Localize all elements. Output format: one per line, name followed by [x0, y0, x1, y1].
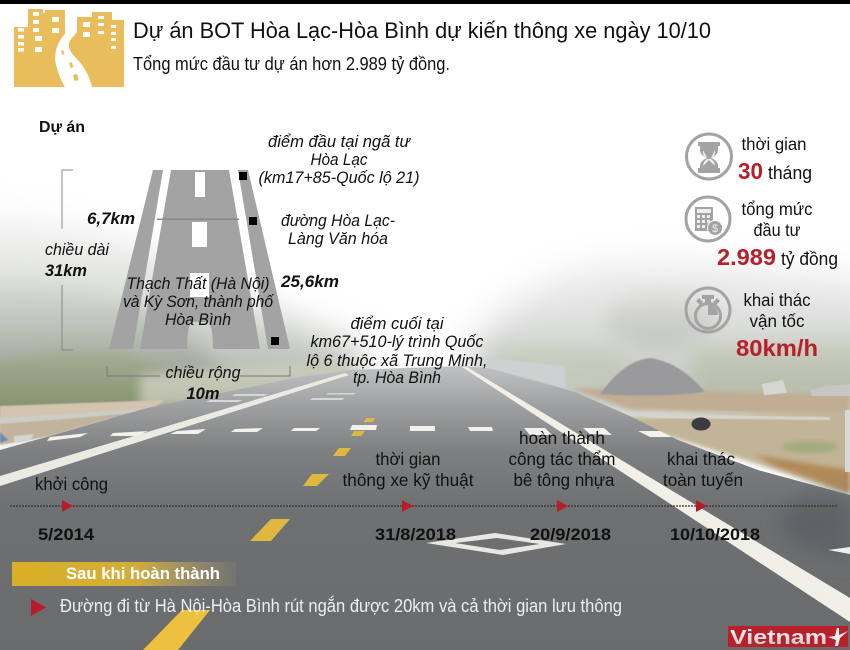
- banner: after completion: Sau khi hoàn thành: [66, 565, 220, 583]
- annotation: start point: (km17+85-Quốc lộ 21): [258, 168, 420, 187]
- title: Dự án BOT Hòa Lạc-Hòa Bình dự kiến thông xe ngày 10/10: [133, 18, 711, 43]
- stat: operating speed: khai thác: [744, 290, 811, 310]
- annotation: Hoa Lac road: Làng Văn hóa: [288, 229, 388, 248]
- fog overlay: [0, 100, 850, 410]
- stat: operating speed: vận tốc: [750, 311, 805, 331]
- milestone: start of construction: 5/2014: [38, 525, 95, 544]
- annotation: width: 10m: [186, 384, 220, 403]
- milestone: asphalt paving complete: 20/9/2018: [530, 525, 611, 544]
- milestone: asphalt paving complete: bê tông nhựa: [514, 470, 615, 490]
- asphalt road: [0, 366, 850, 650]
- annotation: end point: km67+510-lý trình Quốc: [310, 332, 484, 351]
- icon: hourglass: [686, 134, 732, 179]
- width bracket: [107, 366, 290, 376]
- stat: duration: thời gian: [742, 134, 806, 154]
- icon: calculator and coin: $: [712, 223, 718, 235]
- annotation: length: chiều dài: [45, 240, 110, 259]
- length bracket: [62, 170, 73, 350]
- logo: Vietnam+: Vietnam: [730, 627, 827, 649]
- icon: calculator and coin: [686, 197, 730, 241]
- stat: duration: [686, 134, 812, 184]
- milestone: technical opening: thời gian: [376, 449, 440, 469]
- fence: [487, 358, 565, 388]
- annotation: start point: Hòa Lạc: [310, 150, 368, 169]
- annotation: location: Hòa Bình: [165, 310, 231, 329]
- annotation: Hoa Lac road: đường Hòa Lạc-: [281, 211, 395, 230]
- annotation: 25.6 km: 25,6km: [280, 272, 339, 291]
- milestone: asphalt paving complete: hoàn thành: [519, 428, 605, 448]
- milestone: technical opening: thông xe kỹ thuật: [342, 470, 474, 490]
- stat: total investment: tỷ đồng: [781, 249, 838, 269]
- milestone: technical opening: 31/8/2018: [375, 525, 456, 544]
- annotation: width: [166, 363, 241, 403]
- stat: duration: 30: [738, 158, 763, 184]
- stat: total investment: tổng mức: [742, 199, 813, 219]
- milestone: start of construction: khởi công: [35, 474, 108, 494]
- section heading: project: Dự án: [39, 119, 85, 136]
- rock pile: [600, 358, 705, 396]
- annotation: Hoa Lac road: [281, 211, 395, 248]
- banner: after completion: [12, 562, 236, 586]
- subtitle: Tổng mức đầu tư dự án hơn 2.989 tỷ đồng.: [133, 54, 450, 74]
- milestone: start of construction: [35, 474, 108, 544]
- annotation: start point: [258, 132, 420, 187]
- annotation: end point: tp. Hòa Bình: [353, 368, 441, 387]
- icon: city and winding road: [14, 9, 124, 87]
- milestone: asphalt paving complete: [508, 428, 616, 544]
- stat: total investment: đầu tư: [754, 220, 801, 240]
- annotation: start point: điểm đầu tại ngã tư: [268, 132, 411, 151]
- stat: operating speed: 80km/h: [736, 335, 818, 361]
- milestone: full route operation: khai thác: [667, 449, 735, 469]
- ground left: [0, 400, 165, 420]
- milestone: technical opening: [342, 449, 474, 544]
- stat: total investment: 2.989: [717, 244, 776, 270]
- stat: operating speed: [686, 288, 818, 361]
- milestone: full route operation: toàn tuyến: [663, 470, 743, 490]
- annotation: end point: điểm cuối tại: [350, 314, 445, 333]
- start, middle and end markers: [239, 172, 279, 345]
- annotation: location: [123, 274, 274, 329]
- road diagram: [109, 170, 290, 349]
- milestone: full route operation: 10/10/2018: [670, 525, 760, 544]
- milestone: asphalt paving complete: công tác thẩm: [508, 449, 616, 469]
- top black bar: [0, 0, 850, 4]
- ground right: [570, 388, 850, 416]
- timeline: [10, 428, 838, 544]
- stat: duration: tháng: [768, 163, 812, 183]
- annotation: length: [45, 240, 110, 280]
- stat: total investment: [686, 197, 838, 270]
- icon: stopwatch: [686, 288, 730, 332]
- annotation: location: Thạch Thất (Hà Nội): [126, 274, 270, 293]
- milestone: full route operation: [663, 449, 760, 544]
- annotation: location: và Kỳ Sơn, thành phố: [123, 292, 274, 311]
- annotation: length: 31km: [45, 261, 87, 280]
- annotation: end point: [306, 314, 488, 387]
- bullet: shorter route: Đường đi từ Hà Nội-Hòa Bình rút ngắn được 20km và cả thời gian lưu thông: [60, 595, 622, 616]
- logo: Vietnam+: [728, 626, 848, 649]
- annotation: width: chiều rộng: [166, 363, 241, 382]
- annotation: end point: lộ 6 thuộc xã Trung Minh,: [306, 351, 488, 370]
- annotation: 6.7 km: 6,7km: [87, 209, 135, 228]
